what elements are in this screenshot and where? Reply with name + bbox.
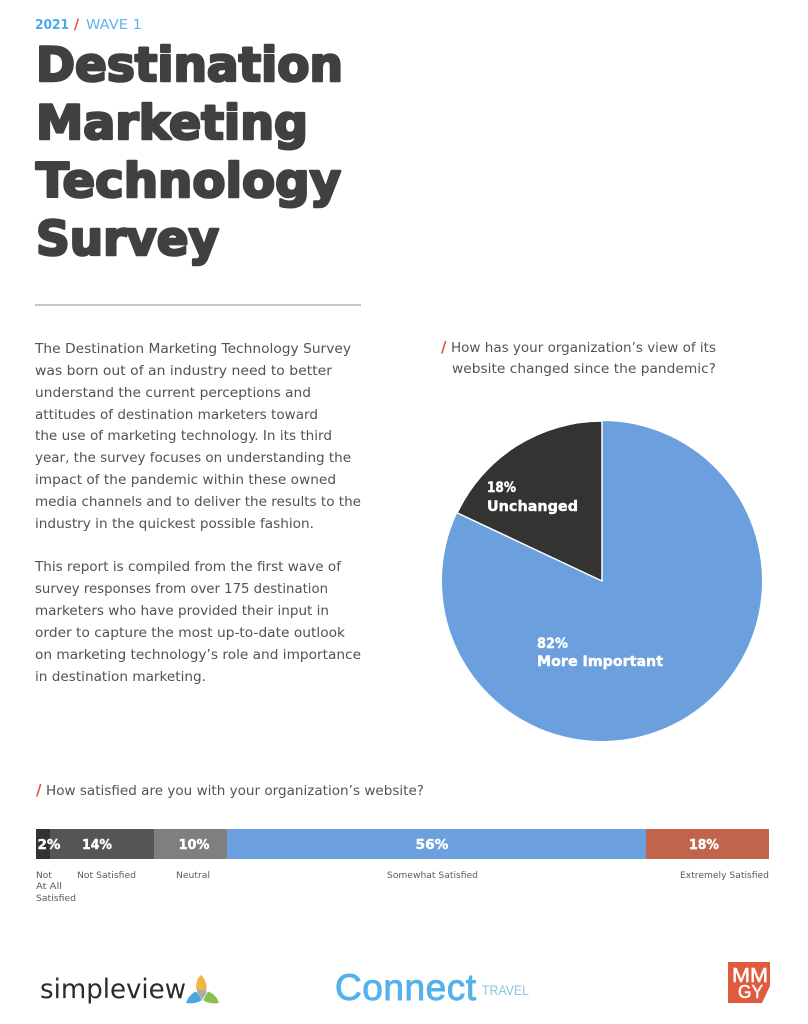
text block: introduction paragraph: The Destination Marketing Technology Survey — [34, 342, 351, 357]
title: Technology — [36, 154, 341, 209]
bar values: 14% — [82, 837, 112, 853]
bar values: 18% — [689, 837, 719, 853]
question: website view: How has your organization’s view of its — [451, 341, 716, 356]
bar labels: At All — [36, 882, 62, 892]
label: unchanged: 18% — [487, 480, 516, 496]
icon: simpleview petals — [186, 975, 219, 1003]
bar labels: Not Satisfied — [77, 871, 136, 881]
label: more important: 82% — [537, 636, 568, 652]
segment: 14% — [50, 829, 154, 859]
bar values: 10% — [178, 837, 210, 853]
title: Survey — [36, 212, 219, 267]
text block: introduction paragraph: was born out of an industry need to better — [35, 364, 333, 379]
logo: MMGY: GY — [738, 982, 763, 1002]
bar values: 2% — [38, 837, 61, 853]
text block: report paragraph: in destination marketing. — [35, 670, 206, 685]
text block: report paragraph: This report is compiled from the first wave of — [34, 560, 341, 575]
stacked bar chart — [36, 829, 769, 904]
bar labels: Neutral — [176, 871, 210, 881]
text block: introduction paragraph — [34, 342, 361, 532]
text block: introduction paragraph: year, the survey focuses on understanding the — [35, 451, 351, 466]
text block: introduction paragraph: industry in the quickest possible fashion. — [35, 517, 314, 532]
bar values — [38, 837, 719, 853]
segment: 2% — [36, 829, 50, 859]
segment: 10% — [154, 829, 227, 859]
text block: report paragraph — [34, 560, 361, 685]
logo: connect travel: TRAVEL — [482, 982, 529, 998]
question: satisfaction: How satisfied are you with your organization’s website? — [46, 784, 424, 799]
bar labels — [36, 871, 769, 904]
title: Destination — [36, 38, 343, 93]
eyebrow: 2021 / wave 1: WAVE 1 — [86, 18, 142, 33]
pie chart — [442, 421, 762, 741]
logo: connect travel: Connect — [335, 967, 477, 1008]
label: more important — [537, 636, 663, 670]
question: website view: website changed since the pandemic? — [452, 362, 716, 377]
text block: introduction paragraph: understand the current perceptions and — [35, 386, 311, 401]
segment: 56% — [227, 829, 646, 859]
text block: introduction paragraph: attitudes of destination marketers toward — [35, 408, 318, 423]
label: more important: More Important — [537, 654, 663, 670]
bar values: 56% — [416, 837, 449, 853]
text block: introduction paragraph: the use of marketing technology. In its third — [35, 429, 332, 444]
eyebrow: 2021 / wave 1: / — [74, 17, 80, 33]
bar labels: Not — [36, 871, 52, 881]
bar labels: Somewhat Satisfied — [387, 871, 478, 881]
bar labels: Satisfied — [36, 894, 76, 904]
logo: MMGY — [728, 962, 770, 1003]
bar labels: Extremely Satisfied — [680, 871, 769, 881]
title: Marketing — [36, 96, 308, 151]
question: satisfaction: / — [36, 781, 42, 799]
text block: introduction paragraph: media channels and to deliver the results to the — [35, 495, 361, 510]
logo: MMGY: MM — [732, 964, 768, 987]
slice: unchanged 18% — [457, 421, 602, 581]
title — [36, 38, 343, 267]
segment: 18% — [646, 829, 769, 859]
label: unchanged: Unchanged — [487, 499, 578, 515]
eyebrow: 2021 / wave 1 — [35, 17, 142, 33]
text block: report paragraph: order to capture the most up-to-date outlook — [35, 626, 345, 641]
eyebrow: 2021 / wave 1: 2021 — [35, 18, 69, 33]
logo: simpleview: simpleview — [40, 974, 186, 1005]
text block: report paragraph: survey responses from over 175 destination — [35, 582, 328, 597]
question: website view: / — [441, 338, 447, 356]
text block: introduction paragraph: impact of the pandemic within these owned — [35, 473, 336, 488]
text block: report paragraph: marketers who have provided their input in — [35, 604, 329, 619]
text block: report paragraph: on marketing technology’s role and importance — [35, 648, 361, 663]
slice: more important 82% — [442, 421, 762, 741]
question: website view — [441, 338, 716, 377]
label: unchanged — [487, 480, 578, 515]
